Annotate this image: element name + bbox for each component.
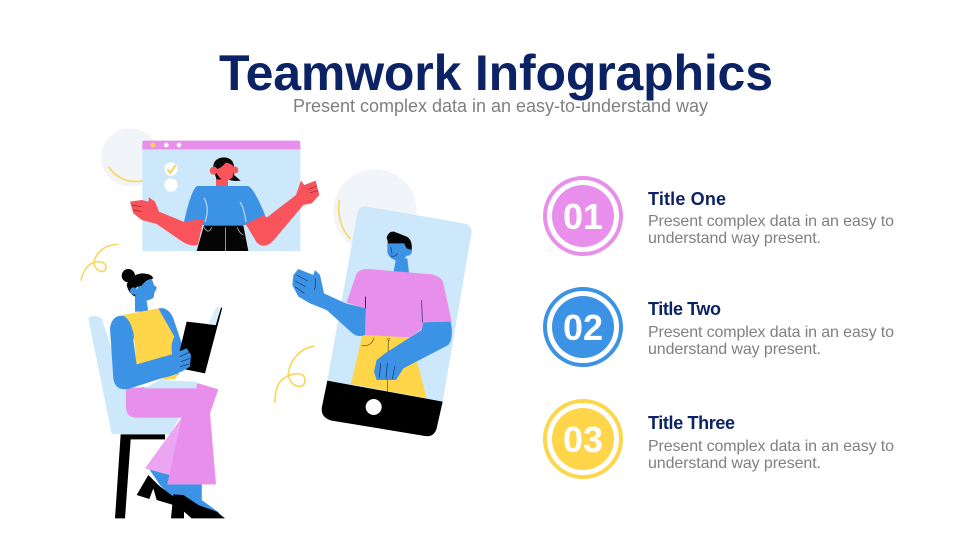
item 1 heading: Title One bbox=[648, 189, 726, 209]
illustration: video call window with presenter bbox=[81, 128, 319, 281]
illustration: seated woman reading bbox=[88, 269, 225, 518]
badge 03: 03 bbox=[563, 419, 603, 460]
checklist icons bbox=[164, 162, 178, 192]
badge 02 bbox=[545, 289, 621, 365]
badge 02: 02 bbox=[563, 307, 603, 348]
title: Teamwork Infographics bbox=[219, 45, 773, 101]
item 2 heading: Title Two bbox=[648, 299, 721, 319]
badge 01 bbox=[545, 178, 621, 254]
man figure bbox=[292, 232, 452, 398]
item 1 bbox=[545, 178, 894, 254]
background circle with arc bbox=[333, 169, 417, 253]
item 2 bbox=[545, 289, 894, 365]
chair bbox=[88, 316, 180, 518]
background circle with arc bbox=[101, 128, 159, 186]
item 3 text: Present complex data in an easy to bbox=[648, 438, 894, 455]
item 3 text: understand way present. bbox=[648, 455, 821, 472]
item 2 text: understand way present. bbox=[648, 341, 821, 358]
squiggle bbox=[275, 346, 314, 403]
item 2 text: Present complex data in an easy to bbox=[648, 324, 894, 341]
item 3 bbox=[545, 401, 894, 477]
phone body bbox=[322, 206, 472, 436]
illustration: phone with man bbox=[275, 169, 472, 436]
item 1 text: Present complex data in an easy to bbox=[648, 213, 894, 230]
woman figure bbox=[110, 269, 225, 518]
item 3 heading: Title Three bbox=[648, 413, 735, 433]
badge 03 bbox=[545, 401, 621, 477]
squiggle bbox=[81, 244, 118, 281]
browser window bbox=[142, 141, 300, 251]
item 1 text: understand way present. bbox=[648, 230, 821, 247]
badge 01: 01 bbox=[563, 196, 603, 237]
presenter figure bbox=[130, 157, 319, 251]
subtitle: Present complex data in an easy-to-understand way bbox=[293, 96, 708, 116]
